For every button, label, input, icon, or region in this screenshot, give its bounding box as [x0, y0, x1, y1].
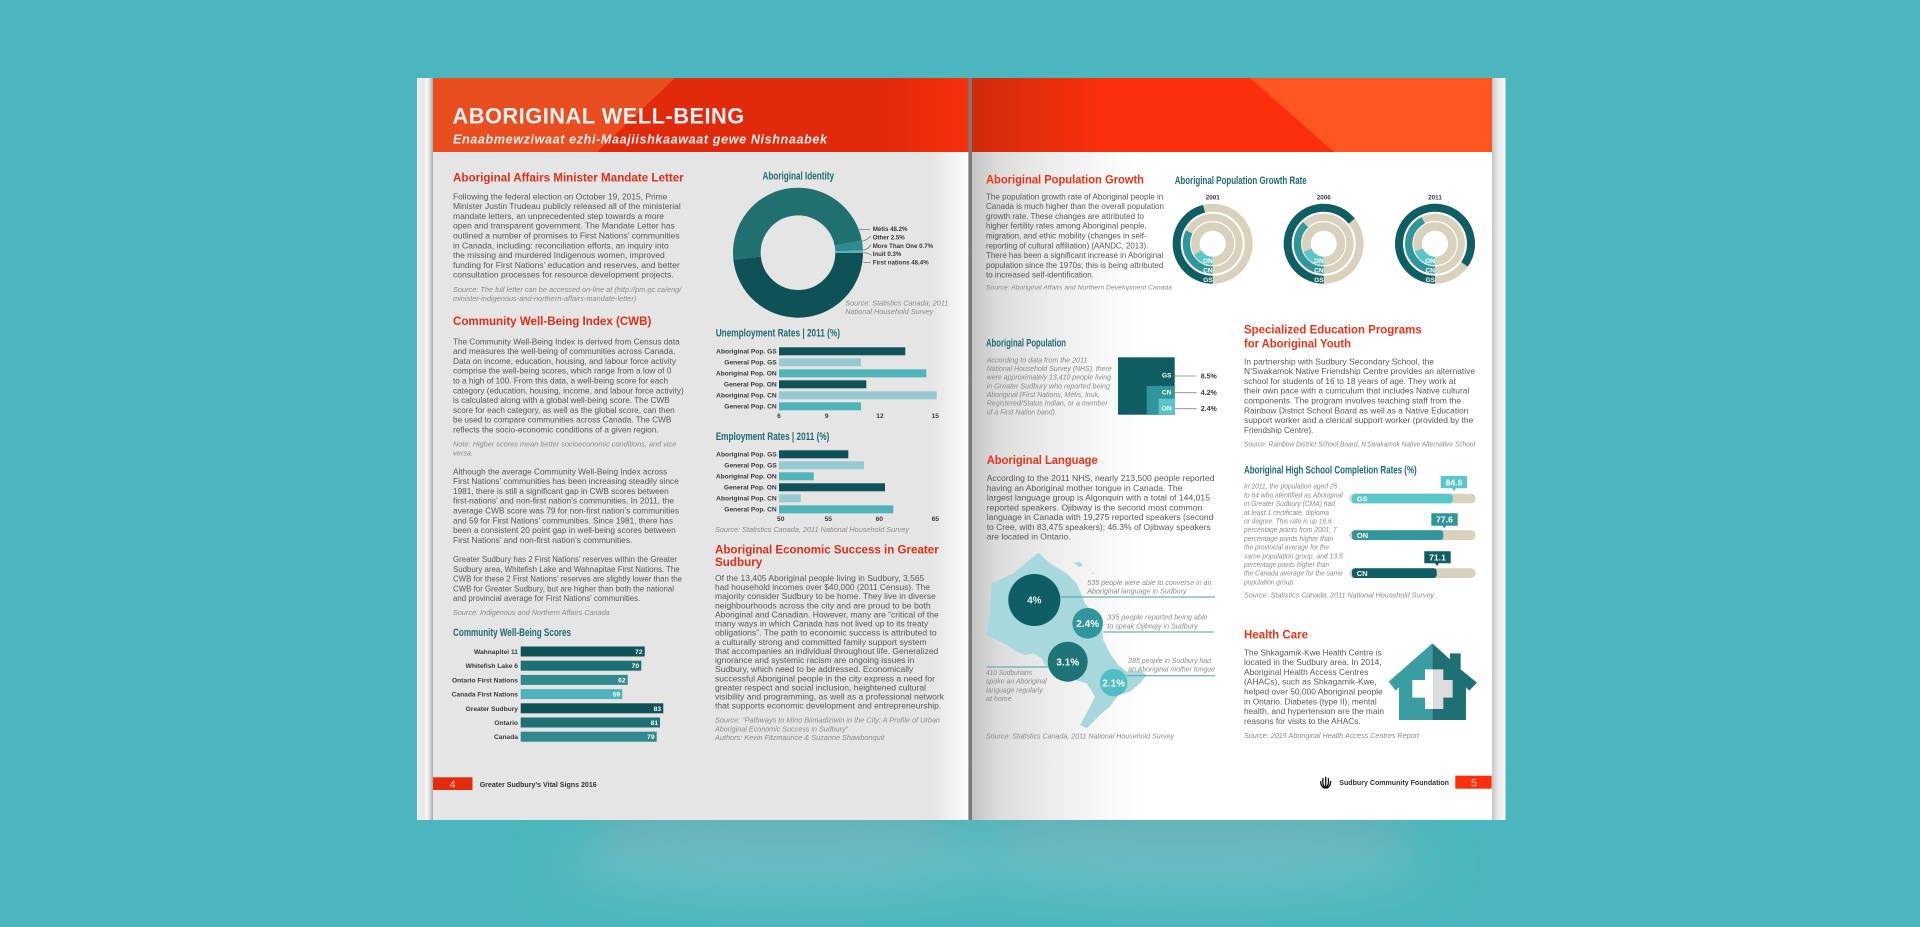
chart title: aboriginal population: Aboriginal Population [986, 338, 1066, 350]
source: language: Source: Statistics Canada, 2011 National Household Survey [986, 733, 1174, 741]
heading: economic success: Sudbury [715, 555, 763, 569]
chart title: high school completion: Aboriginal High School Completion Rates (%) [1244, 465, 1417, 477]
radial chart: 2006: CN [1314, 268, 1324, 275]
map: Ontario language bubbles: 535 people were able to converse in an [1087, 578, 1212, 587]
header band left [433, 78, 970, 152]
text block: economic success: many ways in which Canada has not lived up to its treaty [715, 619, 929, 629]
radial chart: 2006: ON [1314, 258, 1324, 265]
text block: economic success [715, 573, 945, 711]
text block: aboriginal population: National Household Survey (NHS), there [987, 364, 1112, 373]
nested square chart: aboriginal population: 4.2% [1201, 389, 1218, 397]
text block: aboriginal population: of a First Nation band). [987, 407, 1057, 416]
text block: mandate letter: the missing and murdered Indigenous women, improved [453, 250, 665, 260]
icon: house with medical cross [1389, 643, 1477, 720]
panel: left page [417, 78, 970, 820]
source: employment: Source: Statistics Canada, 2011 National Household Survey [715, 525, 910, 534]
text block: high school completion: at least 1 certificate, diploma [1244, 509, 1329, 517]
text block: specialized education: their own pace with a curriculum that includes Native cultural [1244, 386, 1469, 396]
radial chart: 2006: GS [1314, 277, 1324, 284]
radial chart: 2011: ON [1425, 258, 1435, 265]
text block: high school completion: or degree. This rate is up 16.6 [1244, 518, 1332, 526]
footer right [1321, 776, 1492, 789]
text block: specialized education: Rainbow District School Board as well as a Native Education [1244, 405, 1469, 415]
bar chart: community well-being scores: 81 [651, 720, 658, 727]
note: versa. [453, 448, 473, 457]
text block: population growth: growth rate. These changes are attributed to [986, 211, 1144, 221]
text block: CWB definition: and measures the well-being of communities across Canada. [453, 346, 675, 356]
text block: economic success: ignorance and systemic racism are ongoing issues in [715, 655, 915, 665]
nested square chart: aboriginal population: ON [1162, 406, 1172, 413]
bar chart: unemployment rates: Aboriginal Pop. ON [716, 370, 777, 378]
source: identity [845, 298, 948, 316]
note [453, 440, 676, 457]
text block: CWB gap: average CWB score was 79 for non-first nation’s communities [453, 506, 679, 516]
text block: aboriginal language: are located in Ontario. [987, 532, 1071, 542]
radial chart: 2001 [1177, 194, 1249, 284]
text block: CWB definition: Data on income, education, housing, and labour force activity [453, 356, 677, 366]
bar chart: community well-being scores: Ontario First Nations [452, 677, 518, 684]
radial chart: 2006: 2006 [1317, 194, 1331, 201]
text block: mandate letter: consultation processes for resource development projects. [453, 270, 674, 280]
bar chart: completion rates: 77.6 [1436, 515, 1453, 525]
radial chart: 2011: CN [1425, 268, 1435, 275]
text block: economic success: that supports economic development and entrepreneurship. [715, 701, 941, 711]
text block: health care [1244, 647, 1384, 726]
map: Ontario language bubbles: 410 Sudburians [986, 668, 1032, 677]
text block: population growth: population since the 1970s; this is being attributed [986, 260, 1164, 270]
text block: CWB gap: First Nations’ communities has been increasing steadily since [453, 476, 679, 486]
text block: aboriginal language: According to the 2011 NHS, nearly 213,500 people reported [987, 473, 1215, 483]
source: education: Source: Rainbow District School Board, N’Swakamok Native Alternative School [1244, 441, 1475, 448]
text block: CWB definition: category (education, housing, income, and labour force activity) [453, 385, 684, 395]
text block: mandate letter: outlined a number of promises to First Nations’ communities [453, 230, 680, 240]
bar chart: employment rates: 65 [932, 516, 939, 523]
text block: aboriginal population: in Greater Sudbury who reported being [987, 381, 1110, 390]
bar chart: employment rates: General Pop. CN [724, 506, 777, 514]
donut chart: aboriginal identity: Inuit 0.3% [873, 251, 902, 258]
donut chart: aboriginal identity: First nations 48.4% [873, 260, 929, 266]
text block: mandate letter: mandate letters, an unprecedented step towards a more [453, 211, 664, 221]
text block: population growth: Canada is much higher than the overall population [986, 201, 1164, 211]
panel: right page [972, 78, 1506, 820]
bar chart: community well-being scores: 72 [635, 649, 643, 656]
text block: specialized education: In partnership with Sudbury Secondary School, the [1244, 356, 1434, 366]
text block: mandate letter: funding for First Nations’ education and reserves, and better [453, 260, 680, 270]
heading: aboriginal language: Aboriginal Language [987, 453, 1098, 467]
text block: CWB gap: 1981, there is still a significant gap in CWB scores between [453, 486, 669, 496]
heading: mandate letter: Aboriginal Affairs Minister Mandate Letter [453, 170, 684, 184]
heading: economic success: Aboriginal Economic Success in Greater [715, 542, 939, 556]
bar chart: unemployment rates: Aboriginal Pop. GS [716, 348, 777, 356]
radial chart: 2001: ON [1203, 258, 1213, 265]
bar chart: community well-being scores: Greater Sudbury [466, 706, 518, 713]
bar chart: unemployment rates [716, 347, 939, 420]
text block: specialized education [1244, 356, 1475, 435]
bar chart: employment rates: General Pop. ON [724, 484, 777, 492]
bar chart: completion rates [1349, 476, 1476, 578]
source: health care: Source: 2015 Aboriginal Health Access Centres Report [1244, 732, 1420, 740]
text block: population growth: migration, and ethic mobility (changes in self- [986, 230, 1147, 240]
text block: specialized education: N’Swakamok Native Friendship Centre provides an alternative [1244, 366, 1475, 376]
chart title: employment rates: Employment Rates | 2011 (%) [716, 431, 830, 443]
source: economic success: Aboriginal Economic Success in Sudbury” [714, 724, 849, 733]
map: Ontario language bubbles: spoke an Aboriginal [986, 677, 1047, 686]
text block: CWB definition [453, 336, 684, 434]
radial chart: 2011 [1399, 194, 1471, 284]
text block: mandate letter: Minister Justin Trudeau publicly released all of the ministerial [453, 201, 681, 211]
bar chart: community well-being scores [452, 646, 663, 742]
bar chart: unemployment rates: 6 [777, 413, 781, 420]
heading: health care: Health Care [1244, 627, 1308, 641]
bar chart: unemployment rates: Aboriginal Pop. CN [716, 392, 777, 400]
text block: CWB gap [453, 466, 679, 545]
bar chart: completion rates: ON [1357, 531, 1368, 540]
text block: health care: in Ontario. Diabetes (type II), mental [1244, 696, 1377, 706]
text block: CWB gap: Although the average Community Well-Being Index across [453, 466, 667, 476]
map: Ontario language bubbles: 2.1% [1102, 678, 1125, 689]
heading: community well-being index: Community Well-Being Index (CWB) [453, 314, 651, 328]
map: Ontario language bubbles: language regularly [986, 685, 1043, 694]
map: Ontario language bubbles: 4% [1027, 596, 1042, 606]
source: mandate letter: minister-indigenous-and-northern-affairs-mandate-letter) [453, 294, 637, 303]
text block: health care: health, and hypertension are the main [1244, 706, 1384, 716]
radial chart: 2001: 2001 [1206, 194, 1220, 201]
header band right [972, 78, 1492, 152]
text block: CWB definition: to a high of 100. From this data, a well-being score for each [453, 376, 668, 386]
note: Note: Higher scores mean better socioeconomic conditions, and vice [453, 440, 676, 449]
text block: mandate letter: in Canada, including: reconciliation efforts, an inquiry into [453, 240, 669, 250]
text block: high school completion: the provincial average for the [1244, 544, 1329, 552]
text block: aboriginal population: Registered/Status Indian, or a member [987, 399, 1108, 408]
map: Ontario language bubbles: at home [986, 694, 1012, 703]
map: Ontario language bubbles: 2.4% [1076, 619, 1099, 630]
bar chart: employment rates: General Pop. GS [724, 462, 777, 470]
text block: CWB definition: is calculated along with a global well-being score. The CWB [453, 395, 670, 405]
subtitle: Enaabmewziwaat ezhi-Maajiishkaawaat gewe Nishnaabek [453, 132, 828, 146]
source: completion: Source: Statistics Canada, 2011 National Household Survey [1244, 591, 1434, 600]
bar chart: community well-being scores: Whitefish Lake 6 [466, 663, 518, 670]
text block: health care: reasons for visits to the AHACs. [1244, 716, 1361, 726]
map: Ontario language bubbles: to speak Ojibway in Sudbury [1107, 621, 1198, 630]
nested square chart: aboriginal population: CN [1162, 390, 1172, 397]
text block: CWB definition: reflects the socio-economic conditions of a given region. [453, 424, 659, 434]
nested square chart: aboriginal population: 2.4% [1201, 405, 1218, 413]
bar chart: community well-being scores: 62 [618, 677, 626, 684]
map: Ontario language bubbles [986, 553, 1215, 728]
text block: population growth [986, 191, 1164, 280]
text block: aboriginal language [987, 473, 1215, 542]
title: ABORIGINAL WELL-BEING [452, 103, 745, 128]
text block: aboriginal language: language in Canada with 19,275 reported speakers (second [987, 512, 1214, 522]
text block: health care: helped over 50,000 Aboriginal people [1244, 686, 1383, 696]
source: mandate letter: Source: The full letter can be accessed on-line at (http://pm.gc.ca/eng/ [453, 285, 682, 294]
bar chart: unemployment rates: 9 [825, 413, 829, 420]
text block: economic success: greater respect and social inclusion, heightened cultural [715, 682, 926, 692]
source: economic success: Source: “Pathways to Mino Biimadiziwin in the City: A Profile of Urban [715, 716, 940, 725]
text block: CWB definition: score for each category, as well as the global score, can then [453, 405, 675, 415]
text block: population growth: reporting of cultural affiliation) (AANDC, 2013). [986, 240, 1148, 250]
bar chart: completion rates: 84.6 [1446, 477, 1463, 487]
nested square chart: aboriginal population: 8.5% [1201, 372, 1218, 380]
text block: aboriginal population: According to data from the 2011 [986, 355, 1087, 364]
text block: aboriginal language: largest language group is Algonquin with a total of 144,015 [987, 493, 1210, 503]
icon: foundation logo [1321, 777, 1331, 788]
donut chart: aboriginal identity: More Than One 0.7% [873, 243, 934, 250]
text block: high school completion: percentage points higher than [1243, 535, 1333, 543]
heading: specialized education: Specialized Education Programs [1244, 322, 1422, 336]
text block: population growth: There has been a significant increase in Aboriginal [986, 250, 1163, 260]
text block: CWB definition: comprise the well-being scores, which range from a low of 0 [453, 366, 672, 376]
text block: aboriginal language: having an Aboriginal mother tongue in Canada. The [987, 483, 1183, 493]
text block: CWB gap: been a consistent 20 point gap in well-being scores between [453, 525, 676, 535]
footer left: Greater Sudbury’s Vital Signs 2016 [480, 780, 597, 789]
text block: specialized education: Friendship Centre). [1244, 425, 1313, 435]
source: identity: Source: Statistics Canada, 2011 [845, 298, 948, 307]
text block: high school completion: same population group, and 13.5 [1244, 552, 1343, 560]
source: population growth: Source: Aboriginal Affairs and Northern Development Canada [986, 284, 1172, 291]
text block: CWB gap: first-nations’ and non-first nation’s communities. In 2011, the [453, 496, 674, 506]
heading: specialized education: for Aboriginal Youth [1244, 336, 1351, 350]
text block: economic success: that accompanies an individual throughout life. Generalized [715, 646, 939, 656]
bar chart: community well-being scores: 83 [654, 706, 661, 713]
text block: high school completion: in Greater Sudbury (CMA) had [1244, 500, 1336, 508]
text block: CWB gap: First Nations’ and non-first nation’s communities. [453, 535, 632, 545]
text block: high school completion: percentage points from 2001, 7 [1243, 526, 1338, 534]
text block: specialized education: school for students of 16 to 18 years of age. They work at [1244, 376, 1456, 386]
source: economic success [714, 716, 940, 742]
bar chart: unemployment rates: General Pop. CN [724, 404, 777, 410]
text block: health care: The Shkagamik-Kwe Health Centre is [1244, 647, 1382, 657]
bar chart: completion rates: CN [1357, 569, 1368, 578]
text block: Greater Sudbury reserves: Greater Sudbury has 2 First Nations’ reserves within the Greater [453, 554, 677, 564]
bar chart: community well-being scores: 70 [632, 663, 639, 670]
text block: economic success: visibility and programming, as well as a professional network [715, 692, 945, 702]
text block: high school completion: percentage points higher than [1243, 561, 1329, 569]
text block: economic success: Aboriginal and Canadian. However, many are “critical of the [715, 610, 939, 620]
chart title: community well-being scores: Community Well-Being Scores [453, 627, 571, 639]
map: Ontario language bubbles: Aboriginal language in Sudbury [1086, 587, 1187, 596]
source: economic success: Authors: Kevin Fitzmaurice & Suzanne Shawbonquit [714, 733, 885, 742]
map: Ontario language bubbles: 335 people reported being able [1107, 613, 1208, 622]
map: Ontario language bubbles: 3.1% [1056, 657, 1079, 668]
chart title: population growth rate: Aboriginal Population Growth Rate [1175, 175, 1307, 187]
text block: high school completion: population group. [1243, 578, 1295, 586]
text block: population growth: to increased self-identification. [986, 270, 1094, 280]
text block: CWB definition: The Community Well-Being Index is derived from Census data [453, 336, 680, 346]
text block: specialized education: components. The program involves teaching staff from the [1244, 396, 1461, 406]
map: Ontario language bubbles: an Aboriginal mother tongue [1128, 665, 1215, 674]
footer right: Sudbury Community Foundation [1339, 778, 1449, 787]
text block: high school completion: to 64 who identified as Aboriginal [1244, 491, 1343, 499]
text block: aboriginal language: reported speakers. Ojibway is the second most common [987, 502, 1203, 512]
text block: economic success: obligations”. The path to economic success is attributed to [715, 628, 937, 638]
text block: aboriginal population [986, 355, 1112, 416]
text block: Greater Sudbury reserves: Sudbury area, Whitefish Lake and Wahnapitae First Nations. The [453, 564, 680, 574]
bar chart: employment rates [716, 450, 939, 523]
source: CWB: Source: Indigenous and Northern Affairs Canada [453, 608, 610, 617]
text block: health care: Aboriginal Health Access Centres [1244, 667, 1368, 677]
text block: Greater Sudbury reserves: CWB for Greater Sudbury, but are higher than both the national [453, 583, 674, 593]
chart title: unemployment rates: Unemployment Rates | 2011 (%) [716, 328, 840, 340]
radial chart: 2011: GS [1425, 277, 1436, 284]
text block: Greater Sudbury reserves [453, 554, 682, 603]
text block: Greater Sudbury reserves: and provincial average for First Nations’ communities. [453, 593, 640, 603]
bar chart: unemployment rates: General Pop. ON [724, 382, 777, 388]
bar chart: unemployment rates: General Pop. GS [724, 360, 777, 366]
text block: aboriginal population: Aboriginal (First Nations, Métis, Inuk, [986, 390, 1100, 399]
donut chart: aboriginal identity: Other 2.5% [873, 234, 905, 242]
source: mandate letter [453, 285, 682, 303]
heading: economic success [715, 542, 939, 569]
bar chart: completion rates: GS [1357, 494, 1368, 504]
text block: CWB definition: be used to compare communities across Canada. The CWB [453, 415, 672, 425]
text block: economic success: successful Aboriginal people in the city express a need for [715, 673, 935, 683]
text block: mandate letter: Following the federal election on October 19, 2015, Prime [453, 191, 668, 201]
book spine [968, 78, 972, 820]
text block: economic success: a culturally strong and committed family support system [715, 637, 927, 647]
radial chart: 2001: CN [1203, 268, 1213, 275]
text block: economic success: neighbourhoods across the city and are proud to be both [715, 600, 931, 610]
text block: Greater Sudbury reserves: CWB for these 2 First Nations’ reserves are slightly lower than the [453, 574, 682, 584]
source: identity: National Household Survey [845, 307, 935, 316]
footer left: 4 [449, 779, 456, 791]
map: Ontario language bubbles: 285 people in Sudbury had [1127, 656, 1212, 665]
text block: population growth: higher fertility rates among Aboriginal people, [986, 221, 1147, 231]
bar chart: community well-being scores: Wahnapitei 11 [474, 649, 518, 656]
text block: economic success: Of the 13,405 Aboriginal people living in Sudbury, 3,565 [715, 573, 925, 583]
text block: CWB gap: and 59 for First Nations’ communities. Since 1981, there has [453, 515, 673, 525]
text block: economic success: Sudbury, which need to be addressed. Economically [715, 664, 914, 674]
text block: health care: located in the Sudbury area. In 2014, [1244, 657, 1382, 667]
bar chart: community well-being scores: Ontario [494, 720, 518, 727]
heading: specialized education [1244, 322, 1422, 350]
nested square chart: aboriginal population: GS [1162, 373, 1172, 380]
text block: aboriginal language: to Cree, with 83,475 speakers); 46.3% of Ojibway speakers [987, 522, 1211, 532]
bar chart: employment rates: Aboriginal Pop. GS [716, 452, 777, 458]
donut chart: aboriginal identity [738, 193, 934, 313]
chart title: aboriginal identity: Aboriginal Identity [762, 170, 835, 182]
book reflection [560, 816, 1430, 899]
text block: high school completion: In 2011, the population aged 25 [1244, 483, 1337, 491]
map shape: Ontario [987, 553, 1147, 728]
bar chart: employment rates: 60 [876, 516, 883, 523]
text block: health care: (AHACs), such as Shkagamik-Kwe, [1244, 677, 1377, 687]
radial chart: 2006 [1288, 194, 1360, 284]
bar chart: community well-being scores: Canada First Nations [452, 692, 518, 699]
bar chart: employment rates: Aboriginal Pop. ON [716, 474, 777, 480]
text block: mandate letter: open and transparent government. The Mandate Letter has [453, 221, 675, 231]
heading: population growth: Aboriginal Population Growth [986, 172, 1144, 186]
text block: population growth: The population growth rate of Aboriginal people in [986, 191, 1163, 201]
bar chart: completion rates: 71.1 [1429, 552, 1446, 562]
bar chart: unemployment rates: 15 [932, 413, 939, 420]
text block: economic success: had household incomes over $40,000 (2011 Census). The [715, 582, 930, 592]
footer right: 5 [1471, 777, 1477, 789]
footer left [433, 777, 597, 791]
bar chart: unemployment rates: 12 [876, 413, 884, 420]
radial chart: 2011: 2011 [1428, 194, 1442, 201]
text block: economic success: majority consider Sudbury to be home. They live in diverse [715, 591, 936, 601]
bar chart: employment rates: 50 [777, 516, 785, 523]
text block: high school completion: the Canada average for the same [1244, 570, 1343, 578]
bar chart: employment rates: Aboriginal Pop. CN [716, 496, 777, 502]
radial chart: 2001: GS [1203, 277, 1213, 284]
bar chart: employment rates: 55 [825, 516, 832, 523]
bar chart: community well-being scores: Canada [494, 734, 518, 741]
donut chart: aboriginal identity: Métis 48.2% [873, 226, 908, 233]
text block: specialized education: support worker and a clerical support worker (provided by the [1244, 415, 1474, 425]
text block: aboriginal population: were approximately 13,410 people living [987, 373, 1111, 382]
text block: mandate letter [453, 191, 681, 280]
text block: high school completion [1243, 483, 1343, 586]
nested square chart: aboriginal population [1118, 357, 1218, 415]
bar chart: community well-being scores: 59 [613, 692, 620, 699]
bar chart: community well-being scores: 79 [647, 734, 655, 741]
